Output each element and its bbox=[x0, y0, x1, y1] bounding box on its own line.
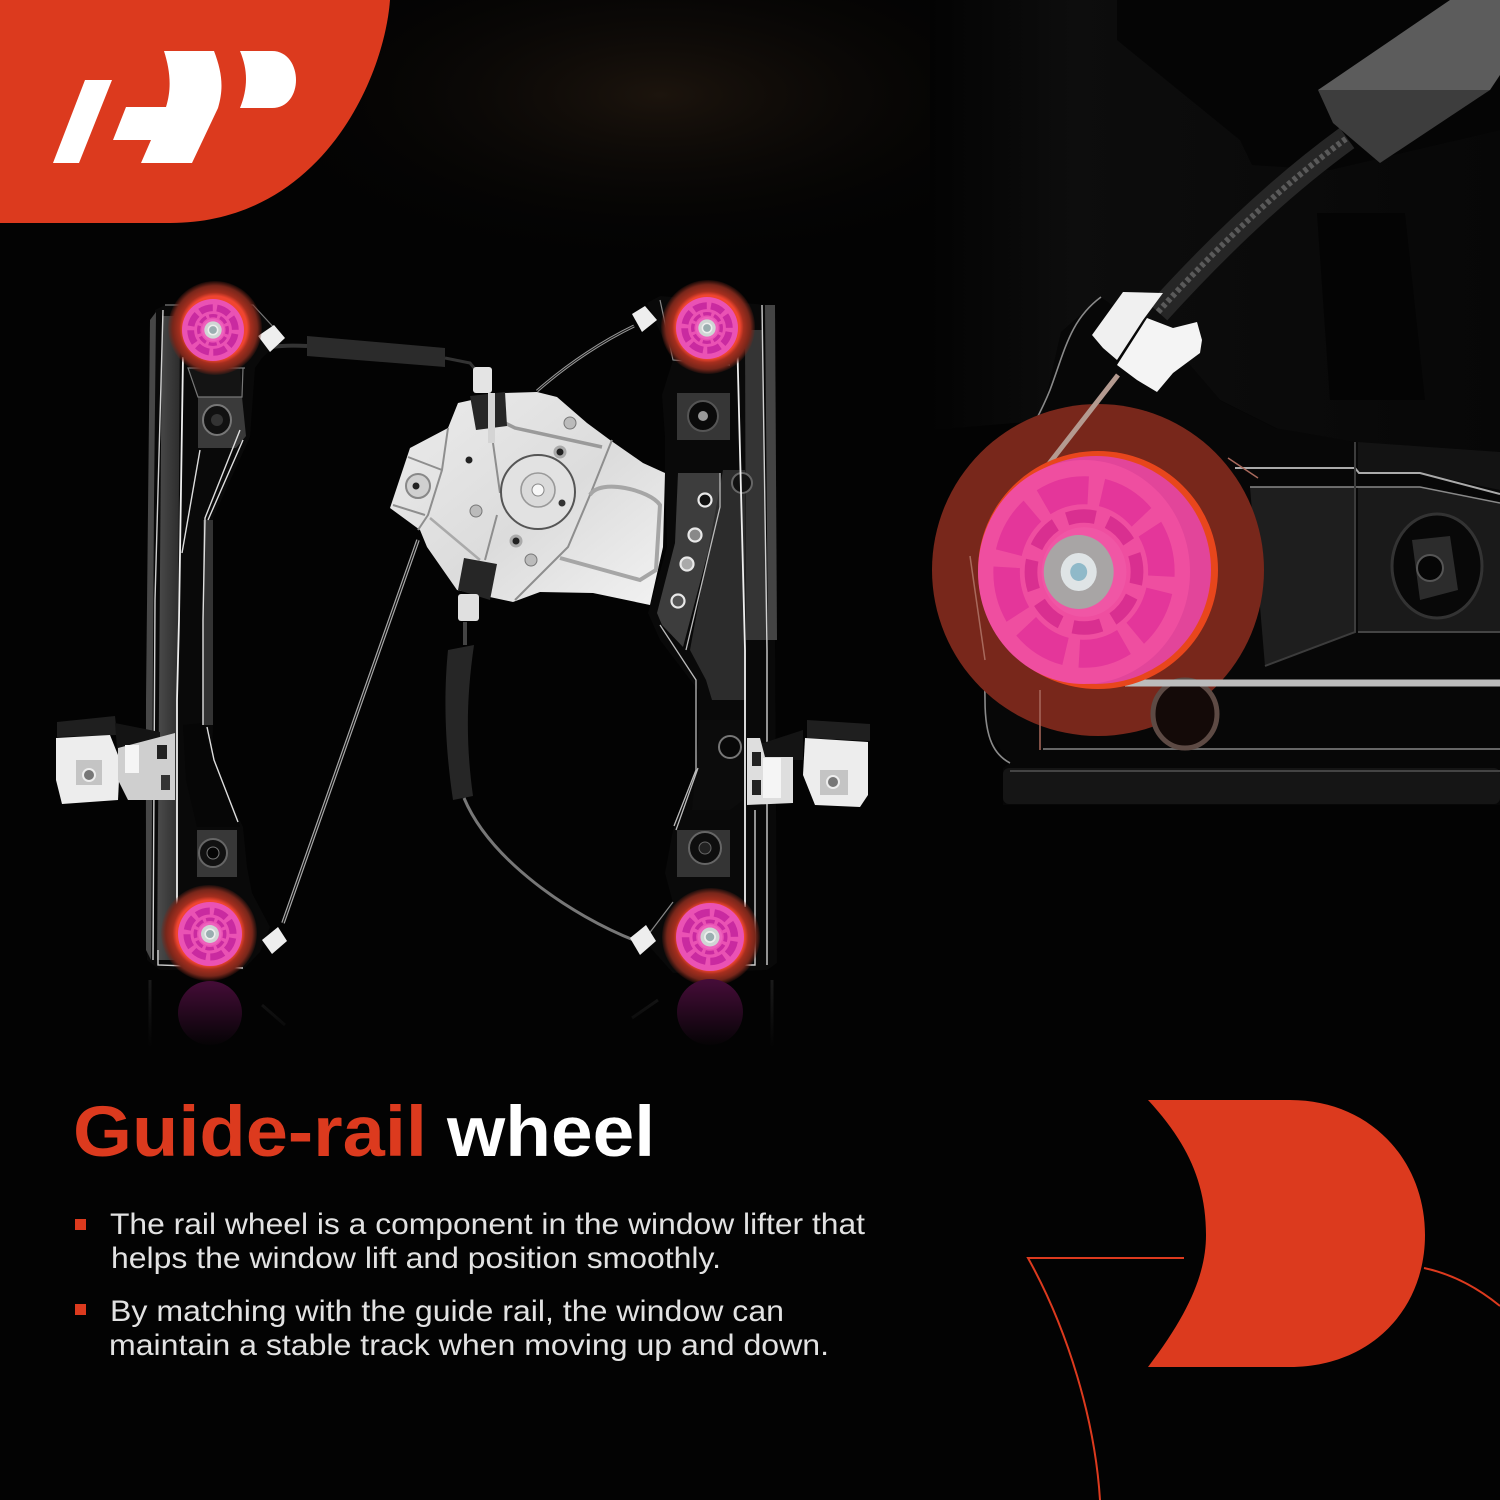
close-up bracket body bbox=[970, 297, 1500, 805]
drive drum bbox=[406, 417, 576, 566]
pulley cable bbox=[970, 375, 1500, 750]
right side clip bbox=[747, 720, 870, 807]
mounting nut bbox=[1392, 514, 1482, 618]
bullet point two: maintain a stable track when moving up and down. bbox=[109, 1329, 829, 1362]
halo highlight bbox=[932, 404, 1264, 736]
bullet point one bbox=[75, 1208, 866, 1275]
guide wheel top right bbox=[661, 280, 755, 374]
white cable clip bbox=[1092, 292, 1202, 392]
decorative brand shape bbox=[1028, 1100, 1500, 1500]
motor mounting plate bbox=[390, 367, 665, 621]
upper right cable bbox=[537, 306, 657, 391]
bullet point two: By matching with the guide rail, the window can bbox=[110, 1295, 784, 1328]
lower right cable with foam sleeve bbox=[445, 622, 656, 955]
heading: wheel bbox=[446, 1093, 655, 1172]
right guide rail bbox=[647, 296, 777, 973]
close-up detail of guide wheel bbox=[932, 0, 1500, 805]
left guide rail bbox=[145, 305, 285, 970]
mounting hole bbox=[1153, 680, 1217, 748]
heading: Guide-rail bbox=[73, 1093, 427, 1172]
large pink wheel bbox=[978, 451, 1218, 689]
lower left cable bbox=[262, 540, 418, 954]
left side clip bbox=[56, 716, 175, 804]
logo mark bbox=[53, 51, 296, 163]
foam sleeve bbox=[1318, 0, 1500, 163]
product reflection bbox=[140, 975, 790, 1060]
window regulator product bbox=[56, 280, 870, 1060]
cable conduit bbox=[1158, 138, 1347, 312]
bullet point one: helps the window lift and position smoothly. bbox=[111, 1242, 721, 1275]
guide wheel bottom right bbox=[662, 888, 760, 986]
bullet point two bbox=[75, 1295, 829, 1362]
guide wheel top left bbox=[168, 281, 262, 375]
lower gear rack bbox=[458, 558, 497, 621]
heading bbox=[73, 1093, 655, 1172]
brand logo panel bbox=[0, 0, 390, 223]
upper left cable with foam sleeve bbox=[258, 325, 480, 375]
upper gear rack bbox=[470, 367, 507, 443]
guide wheel bottom left bbox=[161, 885, 257, 981]
bullet point one: The rail wheel is a component in the window lifter that bbox=[110, 1208, 866, 1241]
